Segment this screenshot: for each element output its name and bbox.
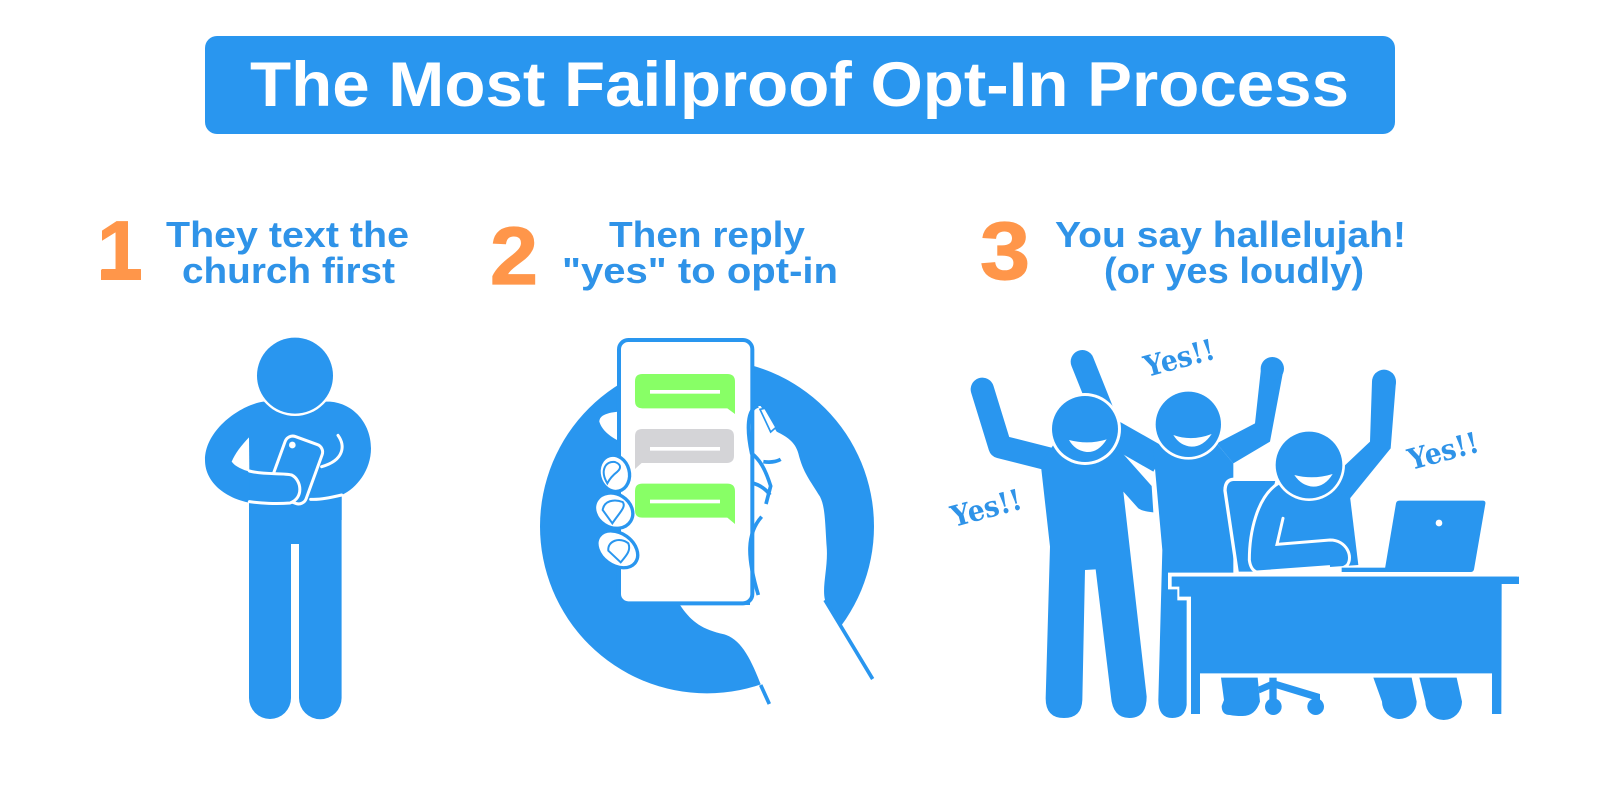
step 1 heading: [97, 205, 409, 296]
icon: hand holding phone with text messages: [540, 340, 874, 705]
fingers: [588, 452, 645, 575]
chair base and legs under desk: [1221, 678, 1260, 716]
step 3 heading: 3: [980, 206, 1030, 297]
icon: three people cheering at a desk: [946, 332, 1519, 720]
hand: [680, 406, 873, 705]
Yes!! callout left: Yes!!: [946, 482, 1025, 534]
message bubble green: [635, 374, 735, 414]
desk: [1170, 575, 1519, 714]
person B standing with raised arms: [1082, 357, 1284, 718]
step 3 heading: [980, 206, 1406, 297]
step 1 heading: church first: [182, 250, 395, 291]
blue circle: [540, 359, 874, 693]
palm gap: [599, 412, 618, 441]
step 1 heading: They text the: [166, 214, 409, 255]
step 1 heading: 1: [97, 205, 143, 296]
hand outline strokes: [761, 600, 873, 704]
arm outline: [1277, 518, 1349, 569]
person A standing with raised arm: [982, 389, 1153, 718]
laptop: [1385, 501, 1485, 572]
step 3 heading: (or yes loudly): [1104, 250, 1364, 291]
step 3 heading: You say hallelujah!: [1055, 214, 1406, 255]
step 2 heading: [490, 211, 838, 302]
message bubble gray: [635, 429, 734, 469]
thumb and finger lines: [748, 406, 781, 595]
title: The Most Failproof Opt-In Process: [250, 50, 1349, 120]
chair back: [1225, 479, 1277, 573]
message bubble green: [635, 484, 735, 524]
Yes!! callout top: Yes!!: [1139, 332, 1218, 384]
person C seated, chair, laptop and desk: [1170, 370, 1519, 720]
person C: [1307, 382, 1396, 498]
step 2 heading: "yes" to opt-in: [562, 250, 838, 291]
step 2 heading: Then reply: [609, 214, 805, 255]
icon: person holding phone: [205, 335, 371, 719]
phone: [619, 340, 752, 603]
title: [205, 36, 1395, 134]
Yes!! callout right: Yes!!: [1403, 425, 1482, 477]
step 2 heading: 2: [490, 211, 538, 302]
